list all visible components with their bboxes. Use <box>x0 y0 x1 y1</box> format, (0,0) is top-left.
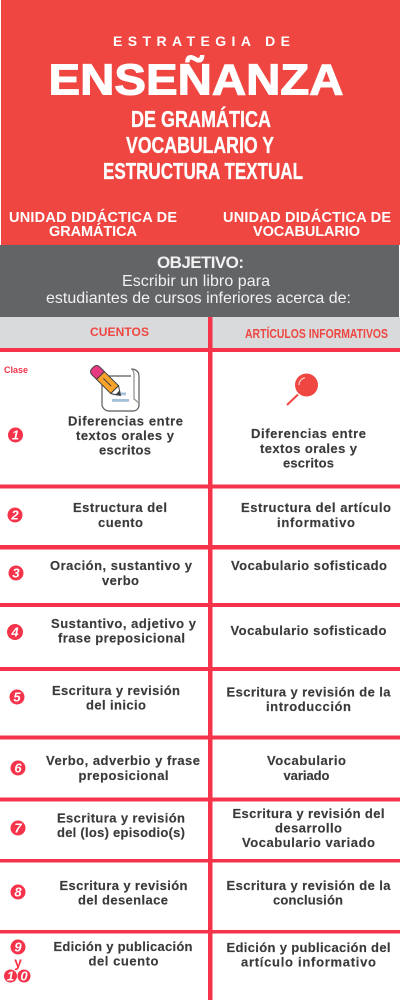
badges 9 y 10: 9 <box>14 940 22 954</box>
row 2 <box>8 500 391 530</box>
text: row 6 right <box>267 753 346 783</box>
badge 4: 4 <box>10 624 19 640</box>
text: row 3 left: Oración, sustantivo y <box>50 558 193 573</box>
badge 1 <box>8 428 23 442</box>
badge 6 <box>10 760 26 776</box>
badge 5 <box>10 690 24 704</box>
text: row 5 right: Escritura y revisión de la <box>226 684 391 700</box>
unit heading: grammar <box>9 209 177 240</box>
table grid <box>0 317 400 1000</box>
row 6 <box>10 753 346 783</box>
text: row 7 left: del (los) episodio(s) <box>57 825 185 840</box>
text: row 6 left: preposicional <box>78 768 168 783</box>
text: row 9 left: Edición y publicación <box>54 939 193 954</box>
text: row 2 left <box>73 500 167 530</box>
text: row 9 right: Edición y publicación del <box>226 940 390 955</box>
text: row 8 right <box>226 878 391 908</box>
badge 7: 7 <box>14 820 22 836</box>
unit heading: vocabulary: UNIDAD DIDÁCTICA DE <box>223 209 391 226</box>
badge 1: 1 <box>12 428 19 442</box>
unit heading: vocabulary: VOCABULARIO <box>253 224 360 240</box>
text: row 5 left: Escritura y revisión <box>52 683 180 698</box>
title: enseñanza: ENSEÑANZA <box>48 54 344 104</box>
badge 7 <box>10 820 26 836</box>
title: estrategia de: ESTRATEGIA DE <box>113 33 290 49</box>
text: row 2 right <box>241 500 391 530</box>
text: row 5 left: del inicio <box>86 698 146 712</box>
row 1 <box>8 414 366 470</box>
text: row 1 right <box>251 426 366 470</box>
objective text <box>46 273 351 307</box>
text: row 2 left: Estructura del <box>73 500 167 515</box>
text: row 1 right: Diferencias entre <box>251 426 366 441</box>
badge 8 <box>10 884 26 900</box>
badges 9 y 10 <box>4 940 30 984</box>
badge 4 <box>7 624 23 640</box>
badge 6: 6 <box>14 760 22 776</box>
text: row 7 right: desarrollo <box>275 820 342 836</box>
text: row 6 right: Vocabulario <box>267 753 346 768</box>
text: row 7 right: Vocabulario variado <box>242 835 375 850</box>
text: row 9 left <box>54 939 193 968</box>
badges 9 y 10: 0 <box>20 968 28 984</box>
text: row 5 right: introducción <box>266 699 351 714</box>
column heading: cuentos: CUENTOS <box>90 325 149 339</box>
icon: magnifying glass <box>287 374 318 405</box>
row 4 <box>7 616 387 646</box>
row 5 <box>10 683 391 714</box>
text: row 8 right: conclusión <box>273 892 343 908</box>
objective text: Escribir un libro para <box>122 273 270 290</box>
text: row 1 left: escritos <box>99 442 151 458</box>
text: row 8 left: Escritura y revisión <box>60 878 188 893</box>
subtitle: DE GRAMÁTICA <box>131 105 271 132</box>
text: row 8 right: Escritura y revisión de la <box>226 878 391 893</box>
text: row 3 left <box>50 558 193 588</box>
text: row 5 left <box>52 683 180 712</box>
row 8 <box>10 878 391 908</box>
badge 5: 5 <box>13 690 21 704</box>
objective heading: OBJETIVO: <box>157 253 244 272</box>
badge 2: 2 <box>10 508 19 522</box>
text: row 4 right: Vocabulario sofisticado <box>230 623 387 638</box>
text: row 7 right: Escritura y revisión del <box>232 806 384 821</box>
badges 9 y 10: 1 <box>7 968 14 984</box>
text: row 3 left: verbo <box>102 573 139 588</box>
badge 2 <box>8 508 22 522</box>
row 7 <box>10 806 384 850</box>
text: row 2 left: cuento <box>98 515 143 530</box>
badge 8: 8 <box>14 884 22 900</box>
badge 3: 3 <box>12 566 20 580</box>
text: row 2 right: Estructura del artículo <box>241 500 391 515</box>
text: row 9 left: del cuento <box>88 954 159 968</box>
column header band <box>0 317 400 348</box>
text: row 1 right: textos orales y <box>260 441 358 456</box>
unit heading: grammar: GRAMÁTICA <box>49 223 138 240</box>
row 3 <box>8 558 387 588</box>
text: row 7 right <box>232 806 384 850</box>
subtitle: VOCABULARIO Y <box>126 132 274 158</box>
text: row 7 left: Escritura y revisión <box>57 810 185 826</box>
label: clase: Clase <box>4 365 28 375</box>
text: row 6 left: Verbo, adverbio y frase <box>46 753 200 768</box>
text: row 5 right <box>226 684 391 714</box>
text: row 1 left: Diferencias entre <box>68 414 183 428</box>
text: row 1 left: textos orales y <box>76 428 175 443</box>
text: row 4 left: frase preposicional <box>58 630 185 646</box>
text: row 9 right: artículo informativo <box>241 954 376 970</box>
text: row 3 right: Vocabulario sofisticado <box>231 558 387 573</box>
text: row 6 right: variado <box>284 768 330 783</box>
text: row 2 right: informativo <box>277 515 355 530</box>
icon: pencil and paper <box>89 364 139 411</box>
objective panel <box>0 245 399 317</box>
text: row 4 left: Sustantivo, adjetivo y <box>51 616 197 631</box>
subtitle: ESTRUCTURA TEXTUAL <box>103 158 303 184</box>
objective text: estudiantes de cursos inferiores acerca de: <box>46 290 351 307</box>
text: row 8 left: del desenlace <box>78 892 168 908</box>
unit heading: grammar: UNIDAD DIDÁCTICA DE <box>9 209 177 226</box>
text: row 4 left <box>51 616 197 646</box>
text: row 7 left <box>57 810 185 840</box>
header panel <box>1 0 400 245</box>
unit heading: vocabulary <box>223 209 391 240</box>
text: row 1 right: escritos <box>283 456 334 470</box>
text: row 9 right <box>226 940 390 970</box>
row 9 and 10 <box>4 939 390 984</box>
text: row 6 left <box>46 753 200 783</box>
badge 3 <box>8 566 24 580</box>
subtitle <box>103 105 303 184</box>
text: row 8 left <box>60 878 188 908</box>
badges 9 y 10: y <box>14 954 22 970</box>
text: row 1 left <box>68 414 183 458</box>
